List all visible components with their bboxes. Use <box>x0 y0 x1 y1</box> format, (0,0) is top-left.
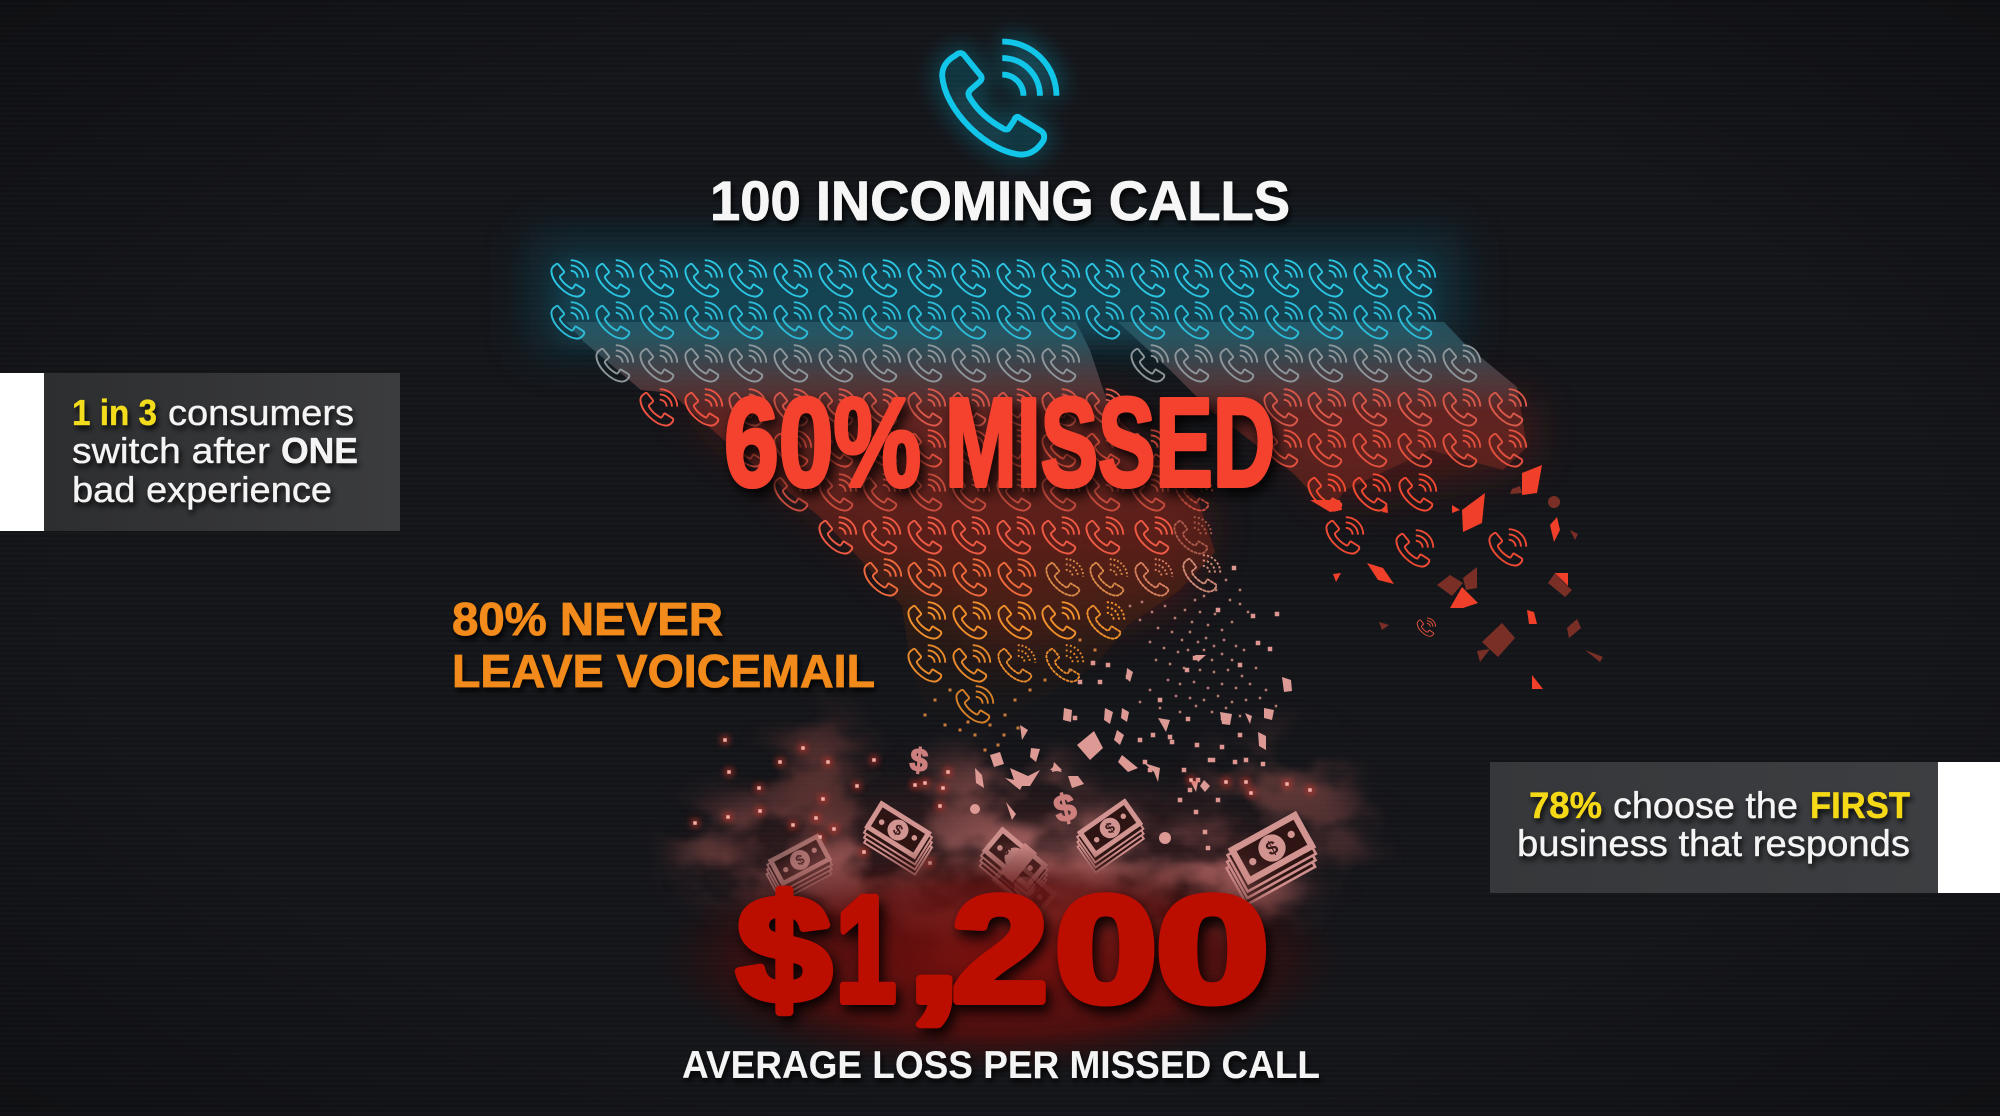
callout: 80% never leave voicemail <box>452 593 875 697</box>
low smoke over cash <box>790 860 1260 930</box>
panel text <box>1517 785 1910 864</box>
headline: $1,200: $ <box>737 865 831 1033</box>
row 8 dissolving calls <box>864 555 1220 596</box>
caption: average loss per missed call: AVERAGE LOSS PER MISSED CALL <box>682 1044 1320 1087</box>
phone grid: 100 incoming calls <box>551 260 1526 723</box>
cyan glow behind top rows <box>530 235 1460 350</box>
pink dust squares <box>1067 568 1277 848</box>
row 11 voicemail call <box>956 686 993 723</box>
headline: $1,200: 2 <box>952 865 1048 1033</box>
cash stack left: $ <box>890 821 906 840</box>
row 3 fading calls <box>596 345 1480 382</box>
cash stack center <box>971 825 1069 919</box>
row 10 voicemail calls <box>908 645 1083 682</box>
panel text: consumers <box>168 392 354 433</box>
panel text: 1 in 3 <box>72 392 157 433</box>
cash stack far left <box>761 833 838 901</box>
row 7 missed calls <box>819 517 1526 567</box>
cash stack center right: $ <box>1103 820 1118 838</box>
dollar sign center: $ <box>1050 786 1081 832</box>
red glow behind loss figure <box>655 845 1345 1075</box>
row 5 missed calls <box>729 430 1526 467</box>
embers glow <box>695 740 1310 863</box>
headline: $1,200: 0 <box>1156 865 1269 1033</box>
cash stack center right <box>1071 798 1150 872</box>
bright shards <box>1310 465 1568 689</box>
dark shards <box>1379 486 1603 662</box>
cash stack right <box>1219 811 1324 905</box>
cash stack center: $ <box>999 842 1015 859</box>
row 1 answered calls <box>551 260 1435 297</box>
headline: $1,200: 0 <box>1055 865 1157 1033</box>
panel text: switch after <box>72 430 270 471</box>
orange dust <box>925 640 1095 750</box>
tiny scattered call <box>1417 618 1436 636</box>
title: 100 INCOMING CALLS <box>710 169 1290 232</box>
panel: 78% choose the first <box>1490 762 2000 893</box>
row 2 answered calls <box>551 302 1435 339</box>
panel text: bad experience <box>72 469 332 510</box>
panel text: 78% <box>1529 785 1602 826</box>
embers <box>695 740 1310 863</box>
red debris shards <box>1310 465 1603 689</box>
row 9 voicemail calls <box>908 602 1124 639</box>
pink shards <box>970 655 1292 844</box>
particles falling into money <box>695 568 1310 863</box>
panel: 1 in 3 consumers <box>0 373 400 531</box>
panel text <box>72 392 358 510</box>
headline: 60% missed: 60% <box>724 372 921 513</box>
funnel stream bands <box>566 322 1527 735</box>
panel text: ONE <box>281 430 358 471</box>
money stacks <box>761 798 1324 930</box>
headline: $1,200: 1 <box>836 865 896 1033</box>
panel text: choose the <box>1613 785 1798 826</box>
cash stack left <box>857 801 939 874</box>
icon: incoming phone <box>942 42 1056 155</box>
callout: 80% never leave voicemail: 80% NEVER <box>452 593 723 645</box>
row 4 missed calls <box>640 389 1526 426</box>
red glow behind missed stream <box>680 400 1530 650</box>
dollar sign left: $ <box>908 741 930 779</box>
row 6 missed calls <box>774 474 1436 511</box>
callout: 80% never leave voicemail: LEAVE VOICEMAIL <box>452 645 875 697</box>
cash stack right: $ <box>1262 836 1282 861</box>
headline: 60% missed: MISSED <box>945 372 1275 513</box>
panel text: business that responds <box>1517 823 1910 864</box>
headline: $1,200: , <box>908 865 960 1033</box>
panel text: FIRST <box>1810 785 1910 826</box>
smoke cloud <box>680 720 1370 960</box>
cash stack far left: $ <box>793 852 808 870</box>
pink dust fine <box>1130 580 1276 716</box>
